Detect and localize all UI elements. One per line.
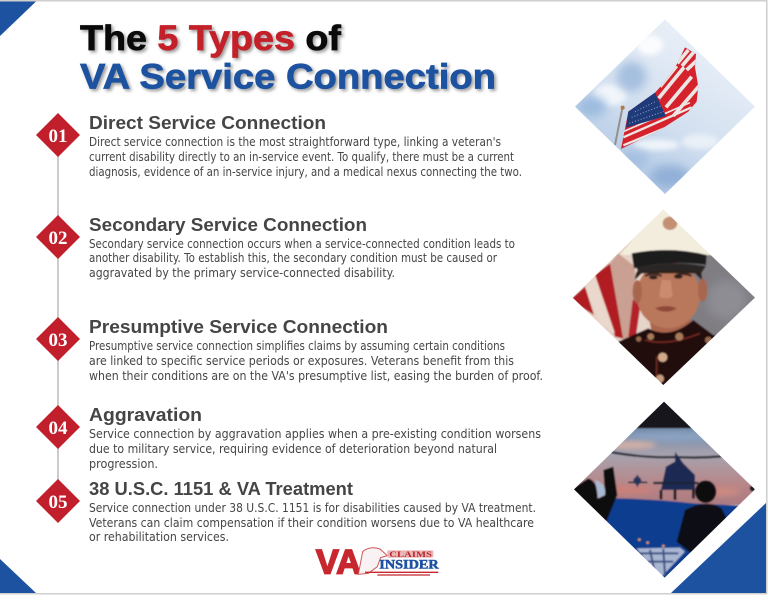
text 02: another disability. To establish this, the secondary condition must be caused or	[89, 251, 498, 265]
text 01: diagnosis, evidence of an in-service injury, and a medical nexus connecting the two.	[89, 165, 522, 179]
logo: VA Claims Insider	[316, 544, 440, 582]
badge 02	[36, 215, 80, 259]
main helicopter	[612, 452, 722, 458]
heading 05: 38 U.S.C. 1151 & VA Treatment	[89, 478, 353, 499]
logo stripes	[365, 572, 438, 575]
flag pole	[615, 108, 622, 145]
text 05: or rehabilitation services.	[89, 530, 229, 544]
timeline connector	[57, 135, 59, 501]
text 04	[89, 427, 541, 471]
corner triangle: top left	[0, 2, 36, 36]
photo: Marine in dress uniform	[572, 210, 755, 385]
item 02	[36, 214, 515, 280]
text 01	[89, 135, 522, 179]
heading 01: Direct Service Connection	[89, 112, 326, 133]
item 01	[36, 112, 522, 179]
badge 04	[36, 405, 80, 449]
title: VA Service Connection	[80, 58, 496, 96]
badge 01: 01	[48, 126, 68, 147]
logo CLAIMS word: CLAIMS	[389, 550, 432, 559]
text 01: current disability directly to an in-service event. To qualify, there must be a current	[89, 150, 514, 164]
uniform	[618, 320, 716, 385]
text 02: aggravated by the primary service-connected disability.	[89, 266, 395, 280]
flag canton	[626, 93, 666, 128]
text 04: due to military service, requiring evidence of deterioration beyond natural	[89, 442, 497, 456]
badge 02: 02	[48, 228, 68, 249]
item 04	[36, 404, 541, 471]
text 03: when their conditions are on the VA's presumptive list, easing the burden of proof.	[89, 369, 543, 383]
neck	[649, 319, 692, 334]
photo: helicopters above ship deck	[570, 400, 760, 582]
badge 03	[36, 317, 80, 361]
text 03: are linked to specific service periods or exposures. Veterans benefit from this	[89, 354, 514, 368]
distant helicopter	[628, 475, 647, 487]
item 05	[36, 478, 536, 544]
badge 05	[36, 479, 80, 523]
text 03	[89, 339, 543, 383]
text 05: Veterans can claim compensation if their condition worsens due to VA healthcare	[89, 516, 534, 530]
text 04: Service connection by aggravation applies when a pre-existing condition worsens	[89, 427, 541, 441]
photo: American flag against sky	[570, 17, 760, 197]
heading 03: Presumptive Service Connection	[89, 316, 388, 337]
flag stripes	[621, 48, 698, 149]
badge 05: 05	[48, 492, 68, 513]
cap top	[620, 207, 717, 255]
heading 04: Aggravation	[89, 404, 202, 425]
logo eagle head	[358, 548, 387, 574]
logo INSIDER word: INSIDER	[379, 558, 440, 572]
item 03	[36, 316, 543, 383]
text 05	[89, 501, 536, 544]
badge 03: 03	[48, 330, 68, 351]
background flag stripes	[572, 263, 624, 340]
crew left	[574, 466, 618, 522]
text 04: progression.	[89, 457, 158, 471]
badge 01	[36, 113, 80, 157]
heading 02: Secondary Service Connection	[89, 214, 367, 235]
face	[637, 262, 700, 328]
title: The 5 Types of	[80, 19, 341, 58]
text 02: Secondary service connection occurs when a service-connected condition leads to	[89, 237, 515, 251]
text 05: Service connection under 38 U.S.C. 1151 is for disabilities caused by VA treatment.	[89, 501, 536, 515]
corner triangle: bottom left	[0, 559, 36, 593]
cap band	[632, 250, 707, 268]
badge 04: 04	[48, 418, 68, 439]
text 01: Direct service connection is the most straightforward type, linking a veteran's	[89, 135, 501, 149]
text 03: Presumptive service connection simplifies claims by assuming certain conditions	[89, 339, 505, 353]
title	[80, 19, 496, 96]
corner triangle: bottom right	[671, 503, 766, 593]
logo VA letters: VA	[316, 544, 361, 582]
text 02	[89, 237, 515, 280]
crew right	[695, 480, 716, 503]
